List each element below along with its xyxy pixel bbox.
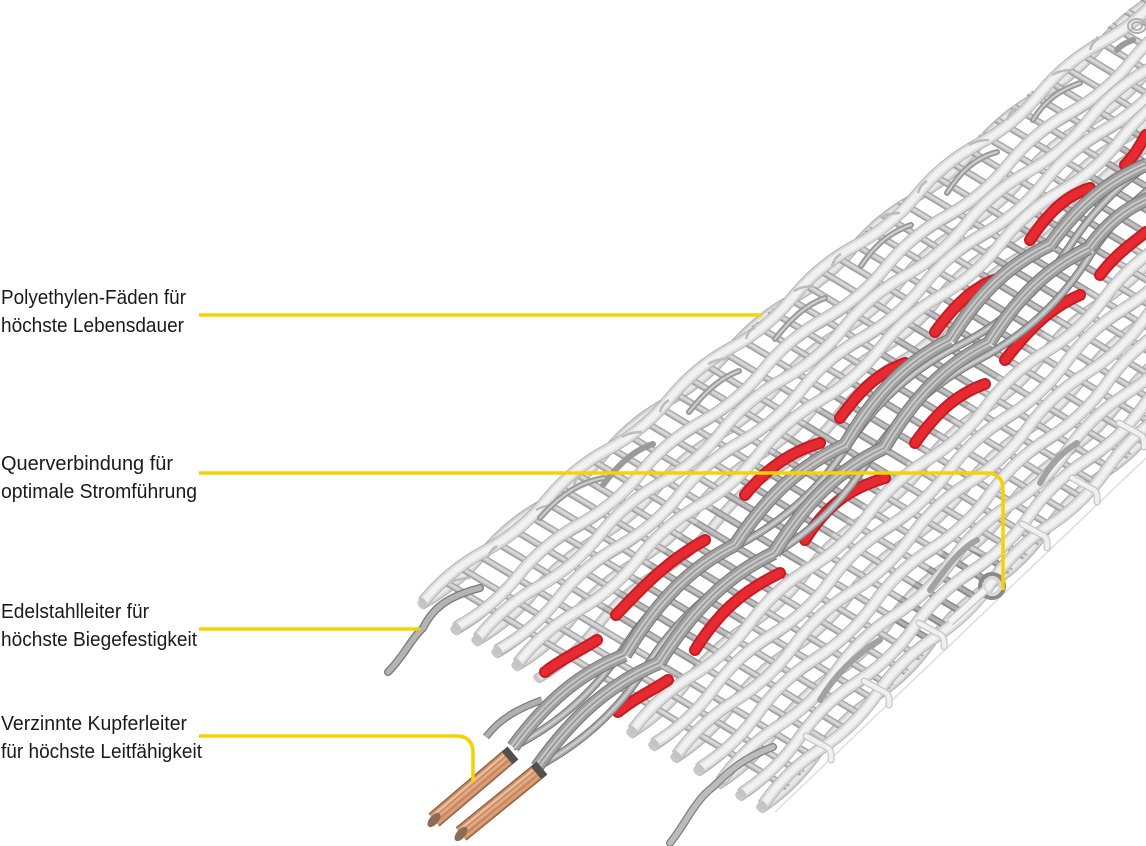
label: stainless steel conductor: Edelstahlleiter für (1, 601, 149, 623)
label: tinned copper conductor: Verzinnte Kupferleiter (1, 713, 187, 735)
label: stainless steel conductor: höchste Biegefestigkeit (1, 629, 197, 651)
front polyethylene threads (417, 0, 1146, 811)
twisted conductor pair 2 (537, 198, 1146, 767)
edge arcs along upper side (450, 38, 1099, 583)
red thread 1 (545, 135, 1146, 672)
thin twisted conductor strands (506, 137, 1146, 774)
leader line: stainless steel (199, 627, 420, 631)
label: stainless steel conductor (1, 601, 197, 651)
label: cross connection (1, 453, 197, 503)
top corner swirl (1128, 19, 1146, 33)
label: polyethylene threads: höchste Lebensdauer (1, 315, 184, 337)
loose grey strand end (486, 700, 542, 737)
cross threads (440, 0, 1146, 790)
copper conductor 1 (425, 753, 513, 829)
red thread 2 (618, 232, 1146, 712)
leader line: cross connection (199, 473, 1003, 590)
label: polyethylene threads (1, 287, 186, 337)
edge line and hooks of cross threads (775, 423, 1146, 812)
leader line: copper (199, 736, 473, 782)
label: polyethylene threads: Polyethylen-Fäden für (1, 287, 186, 309)
twisted conductor pair 1 (513, 165, 1146, 747)
stainless steel strand upper (388, 40, 1133, 672)
back polyethylene threads (416, 0, 1146, 814)
label: cross connection: optimale Stromführung (1, 481, 197, 503)
illustration: woven ribbon (388, 0, 1146, 843)
label: tinned copper conductor (1, 713, 202, 763)
stainless steel strand lower (670, 443, 1077, 843)
cross connection loop (950, 574, 1004, 622)
label: cross connection: Querverbindung für (1, 453, 173, 475)
leader line: polyethylene (199, 313, 762, 317)
label: tinned copper conductor: für höchste Leitfähigkeit (1, 741, 202, 763)
copper conductor 2 (452, 768, 542, 843)
